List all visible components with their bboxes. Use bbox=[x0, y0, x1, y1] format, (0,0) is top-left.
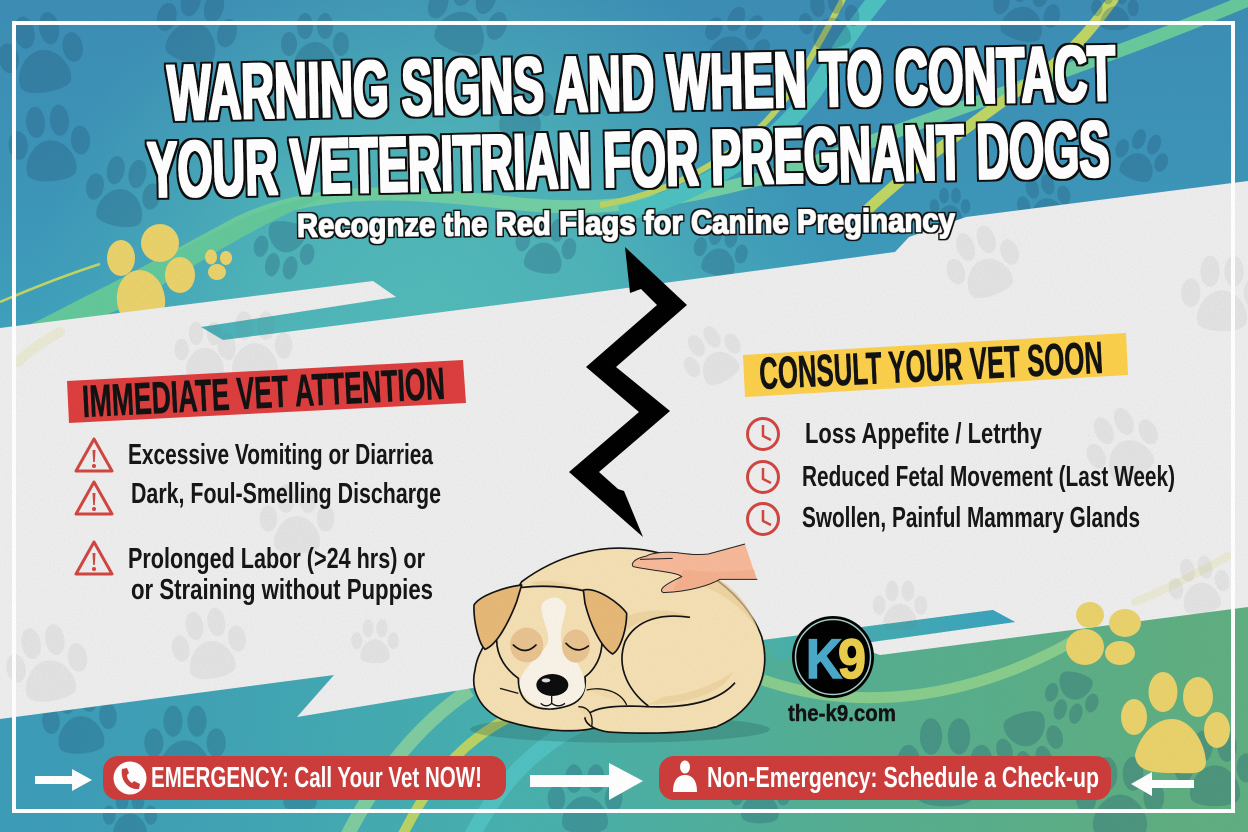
button: emergency bbox=[103, 756, 506, 800]
item: loss of appetite bbox=[748, 418, 1042, 450]
button: non-emergency bbox=[659, 756, 1111, 800]
item: excessive vomiting: Excessive Vomiting or Diarriea bbox=[128, 439, 434, 471]
logo: K9 badge: K bbox=[806, 627, 842, 690]
faint bands on white panel bbox=[18, 332, 1228, 602]
panel: immediate vet attention bbox=[67, 358, 466, 606]
arrow: center bbox=[530, 763, 643, 800]
item: prolonged labor: Prolonged Labor (>24 hrs) or bbox=[128, 543, 425, 575]
yellow paw: right small over edge bbox=[1066, 602, 1141, 665]
item: excessive vomiting bbox=[76, 439, 434, 471]
heading: immediate vet attention bbox=[67, 358, 466, 427]
lower teal-blue strip bbox=[763, 610, 1015, 660]
item: loss of appetite: Loss Appefite / Letrthy bbox=[805, 418, 1042, 450]
icon: person bbox=[673, 760, 697, 792]
yellow paw: upper left bbox=[107, 224, 232, 333]
panel: consult your vet soon bbox=[743, 332, 1175, 534]
item: prolonged labor bbox=[76, 542, 433, 606]
white central diagonal panel bbox=[0, 181, 1248, 719]
icon: phone bbox=[114, 762, 146, 794]
arrow: right bbox=[1131, 772, 1194, 796]
title bbox=[146, 28, 1116, 214]
zigzag lightning arrow bbox=[569, 247, 687, 537]
logo: K9 badge bbox=[792, 616, 874, 698]
item: swollen mammary glands bbox=[748, 502, 1140, 534]
heading: immediate vet attention: IMMEDIATE VET ATTENTION bbox=[81, 358, 446, 427]
logo: K9 badge: 9 bbox=[838, 627, 866, 690]
item: dark discharge: Dark, Foul-Smelling Discharge bbox=[131, 478, 441, 510]
website label: the-k9.com bbox=[788, 700, 896, 726]
button: emergency: EMERGENCY: Call Your Vet NOW! bbox=[151, 762, 482, 794]
item: dark discharge bbox=[76, 478, 441, 514]
item: prolonged labor: or Straining without Puppies bbox=[131, 574, 433, 606]
illustration: sleeping dog with hand bbox=[470, 544, 770, 743]
heading: consult your vet soon bbox=[743, 332, 1128, 399]
faint grey paw prints on white panel bbox=[0, 217, 1248, 708]
arrow: left bbox=[35, 769, 92, 791]
subtitle: Recognze the Red Flags for Canine Preginancy bbox=[297, 201, 956, 244]
yellow paw: right large bbox=[1121, 672, 1230, 773]
button: non-emergency: Non-Emergency: Schedule a Check-up bbox=[707, 762, 1099, 794]
